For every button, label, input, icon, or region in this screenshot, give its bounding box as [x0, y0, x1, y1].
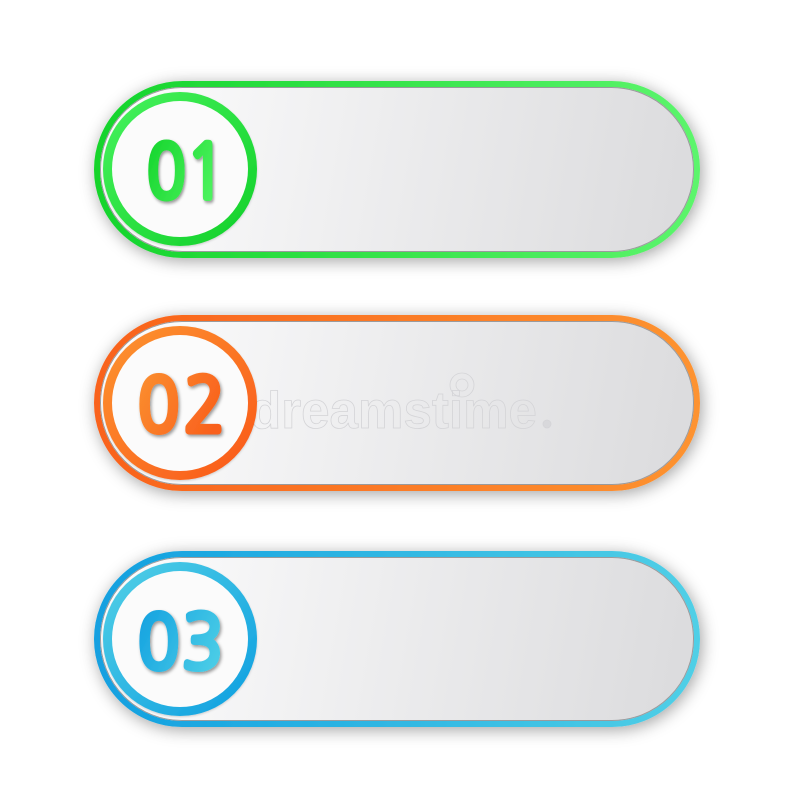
- number badge ring: [108, 566, 252, 712]
- panel: banner 01: [97, 84, 697, 255]
- inner grey edge: [100, 88, 694, 252]
- number badge ring: [108, 330, 252, 476]
- pill outline: orange: [97, 318, 697, 488]
- inner grey edge: [100, 322, 694, 484]
- number 02: 02: [138, 369, 230, 443]
- watermark: dreamstime: [250, 382, 537, 440]
- panel: banner 02: [97, 318, 697, 488]
- number 01: 01: [147, 135, 226, 209]
- number 03: 03: [138, 606, 226, 680]
- inner grey edge: [100, 558, 694, 720]
- pill outline: green: [97, 84, 697, 255]
- pill outline: blue: [97, 554, 697, 724]
- panel: banner 03: [97, 554, 697, 724]
- number badge ring: [108, 96, 252, 242]
